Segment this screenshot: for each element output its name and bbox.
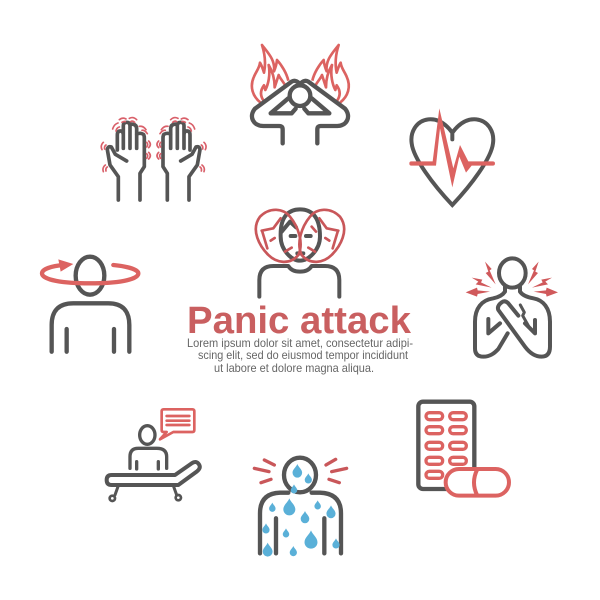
- icon: head in hands with flames: [252, 45, 349, 143]
- side faces: [256, 210, 344, 262]
- capsule: [446, 469, 509, 496]
- title: Panic attack: [187, 300, 412, 342]
- pain bolts: [466, 262, 558, 297]
- icon: dizziness: [42, 257, 138, 352]
- description text: scing elit, sed do eiusmod tempor incididunt: [198, 348, 409, 362]
- icon: blurred triple face: [256, 209, 344, 297]
- icon: chest pain: [466, 258, 558, 357]
- person: [260, 458, 341, 553]
- icon: heart with pulse line: [409, 108, 495, 205]
- description text: [187, 336, 413, 375]
- couch: [107, 462, 200, 501]
- flames: [252, 45, 349, 103]
- person holding head: [252, 81, 348, 143]
- heart: [411, 119, 493, 205]
- person: [52, 257, 129, 352]
- blister pills: [426, 413, 466, 478]
- sweat drops: [262, 464, 340, 557]
- blister pack: [418, 402, 474, 489]
- icon: shaking hands: [101, 118, 206, 200]
- patient: [130, 426, 167, 469]
- icon: medication pills: [418, 402, 509, 496]
- central face: [259, 209, 339, 297]
- icon: sweating person: [254, 458, 347, 557]
- speech bubble: [160, 409, 194, 439]
- rotation arrow: [42, 259, 138, 283]
- description text: ut labore et dolore magna aliqua.: [214, 361, 374, 375]
- pulse line: [409, 108, 495, 187]
- icon: therapy couch with speech bubble: [107, 409, 200, 501]
- person clutching chest: [475, 258, 550, 357]
- sweat rays: [254, 459, 347, 483]
- description text: Lorem ipsum dolor sit amet, consectetur adipi-: [187, 336, 413, 350]
